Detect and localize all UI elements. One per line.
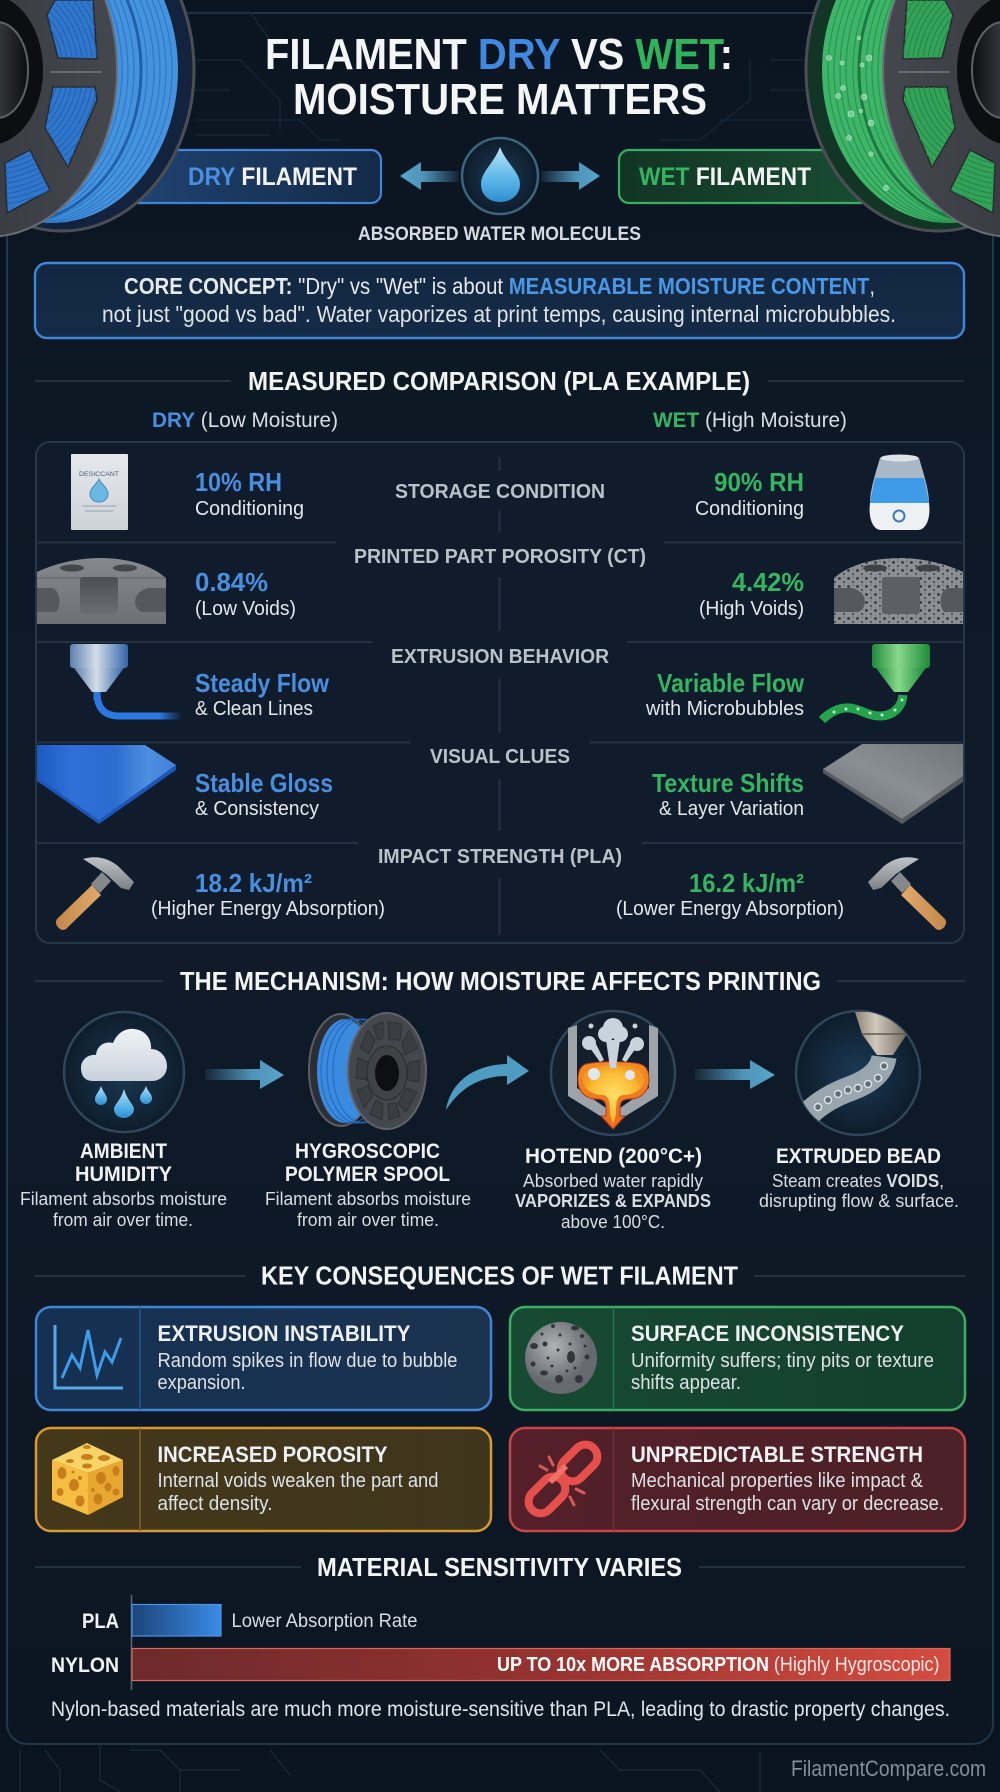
step: ambient humidity: Filament absorbs moisture xyxy=(20,1188,227,1209)
dry filament label: DRY FILAMENT xyxy=(188,163,357,191)
column head: wet: WET (High Moisture) xyxy=(653,408,847,432)
icon: porous cheese cube xyxy=(52,1443,123,1515)
step: ambient humidity: AMBIENT xyxy=(80,1140,167,1163)
icon: rain cloud xyxy=(64,1012,184,1132)
step: extruded bead xyxy=(759,1011,959,1211)
dry porosity value xyxy=(195,567,296,620)
green filament spool xyxy=(806,0,1000,237)
wet visual value: Texture Shifts xyxy=(652,768,804,798)
step: extruded bead: Steam creates VOIDS, xyxy=(772,1170,944,1191)
icon: filament spool xyxy=(309,1013,426,1129)
step: ambient humidity: from air over time. xyxy=(53,1209,193,1230)
icon: desiccant packet: DESICCANT xyxy=(79,471,119,478)
card: extrusion instability: Random spikes in flow due to bubble xyxy=(158,1350,458,1372)
step: extruded bead: disrupting flow & surface. xyxy=(759,1190,959,1211)
card: extrusion instability: expansion. xyxy=(158,1372,246,1394)
icon: water drop xyxy=(462,138,538,214)
dry impact value xyxy=(151,868,385,920)
wet visual value xyxy=(652,768,804,820)
dry storage value xyxy=(195,467,304,520)
icon: glossy blue plate xyxy=(37,745,176,824)
wet storage value: 90% RH xyxy=(714,467,804,497)
blue filament spool xyxy=(0,0,194,237)
bar: Nylon xyxy=(51,1648,950,1680)
absorbed water molecules caption: ABSORBED WATER MOLECULES xyxy=(358,223,641,245)
wet storage value: Conditioning xyxy=(695,497,804,520)
bar: Nylon: NYLON xyxy=(51,1654,119,1677)
wet impact value: 16.2 kJ/m² xyxy=(689,868,804,898)
dry visual value: Stable Gloss xyxy=(195,768,333,798)
dry porosity value: (Low Voids) xyxy=(195,597,296,620)
bar: PLA: Lower Absorption Rate xyxy=(232,1611,418,1632)
wet visual value: & Layer Variation xyxy=(659,797,804,820)
icon: porous printed part xyxy=(834,558,963,624)
dry storage value: 10% RH xyxy=(195,467,282,497)
card: extrusion instability: EXTRUSION INSTABILITY xyxy=(158,1321,411,1346)
step: hotend: above 100°C. xyxy=(561,1211,665,1232)
icon: bead with voids xyxy=(796,1011,920,1135)
icon: right arrow xyxy=(541,162,600,190)
arrow: step 3 to 4 xyxy=(695,1060,775,1089)
row label: porosity: PRINTED PART POROSITY (CT) xyxy=(354,546,646,568)
wet impact value xyxy=(616,868,844,920)
step: hotend: Absorbed water rapidly xyxy=(523,1170,704,1191)
wet storage value xyxy=(695,467,804,520)
step: hygroscopic polymer spool: Filament absorbs moisture xyxy=(265,1188,471,1209)
title: FILAMENT DRY VS WET: xyxy=(265,30,733,79)
title: MOISTURE MATTERS xyxy=(293,75,707,124)
step: ambient humidity: HUMIDITY xyxy=(75,1163,172,1186)
dry extrusion value: Steady Flow xyxy=(195,668,330,698)
card: increased porosity: INCREASED POROSITY xyxy=(158,1442,388,1467)
icon: dense printed part xyxy=(37,558,166,624)
heading: material sensitivity: MATERIAL SENSITIVITY VARIES xyxy=(317,1552,682,1582)
card: increased porosity: affect density. xyxy=(158,1493,272,1515)
chart: absorption bars xyxy=(51,1595,950,1690)
step: hygroscopic polymer spool: from air over time. xyxy=(297,1209,439,1230)
core concept callout xyxy=(35,263,964,338)
panel: comparison table xyxy=(36,442,964,943)
wet porosity value xyxy=(699,567,804,620)
step: hotend xyxy=(515,1011,711,1232)
card: surface inconsistency xyxy=(510,1307,965,1410)
icon: dry nozzle with clean line xyxy=(70,644,182,716)
icon: left arrow xyxy=(400,162,459,190)
wet extrusion value: Variable Flow xyxy=(657,668,805,698)
step: ambient humidity xyxy=(20,1012,227,1230)
step: extruded bead: EXTRUDED BEAD xyxy=(776,1145,941,1168)
icon: unstable flow chart xyxy=(55,1325,123,1388)
dry storage value: Conditioning xyxy=(195,497,304,520)
dry impact value: 18.2 kJ/m² xyxy=(195,868,312,898)
card: surface inconsistency: shifts appear. xyxy=(631,1372,741,1394)
card: unpredictable strength: Mechanical properties like impact & xyxy=(631,1470,924,1492)
icon: right hammer xyxy=(868,857,946,930)
icon: pitted surface xyxy=(525,1322,597,1394)
card: extrusion instability xyxy=(36,1307,491,1410)
icon: left hammer xyxy=(56,857,134,930)
icon: humidifier xyxy=(870,454,929,530)
row label: extrusion behavior: EXTRUSION BEHAVIOR xyxy=(391,646,610,668)
step: hygroscopic polymer spool xyxy=(265,1013,471,1230)
card: surface inconsistency: Uniformity suffers; tiny pits or texture xyxy=(631,1350,934,1372)
dry visual value: & Consistency xyxy=(195,797,320,820)
icon: desiccant packet xyxy=(71,454,128,530)
dry extrusion value xyxy=(195,668,330,720)
column head: dry: DRY (Low Moisture) xyxy=(152,408,338,432)
faint header circuit traces xyxy=(190,12,810,140)
arrow: step 1 to 2 xyxy=(205,1060,284,1089)
step: hygroscopic polymer spool: HYGROSCOPIC xyxy=(295,1140,440,1163)
row label: visual clues: VISUAL CLUES xyxy=(430,746,570,768)
dry impact value: (Higher Energy Absorption) xyxy=(151,897,385,920)
wet extrusion value: with Microbubbles xyxy=(645,697,804,720)
step: hygroscopic polymer spool: POLYMER SPOOL xyxy=(285,1163,450,1186)
footnote: Nylon-based materials are much more moisture-sensitive than PLA, leading to drastic property changes. xyxy=(51,1698,950,1721)
dry extrusion value: & Clean Lines xyxy=(195,697,313,720)
core concept callout: CORE CONCEPT: "Dry" vs "Wet" is about MEASURABLE MOISTURE CONTENT, xyxy=(124,273,875,299)
bar: Nylon: UP TO 10x MORE ABSORPTION (Highly Hygroscopic) xyxy=(497,1654,940,1676)
icon: hotend with steam xyxy=(551,1011,675,1135)
wet filament label: WET FILAMENT xyxy=(639,163,811,191)
arrow: step 2 to 3 (curved) xyxy=(446,1055,529,1110)
title xyxy=(265,30,733,124)
dry porosity value: 0.84% xyxy=(195,567,268,597)
card: surface inconsistency: SURFACE INCONSISTENCY xyxy=(631,1321,904,1346)
card: increased porosity: Internal voids weaken the part and xyxy=(158,1470,438,1492)
wet porosity value: (High Voids) xyxy=(699,597,804,620)
row label: impact strength: IMPACT STRENGTH (PLA) xyxy=(378,846,622,868)
icon: wet nozzle with bubbly bead xyxy=(822,644,930,720)
dry visual value xyxy=(195,768,333,820)
heading: measured comparison: MEASURED COMPARISON (PLA EXAMPLE) xyxy=(248,366,750,396)
core concept callout: not just "good vs bad". Water vaporizes at print temps, causing internal microbubbles. xyxy=(102,301,896,327)
icon: breaking chain link xyxy=(524,1440,602,1518)
step: hotend: HOTEND (200°C+) xyxy=(525,1145,702,1168)
wet filament pill xyxy=(619,150,880,203)
icon: textured gray plate xyxy=(823,744,963,824)
step: hotend: VAPORIZES & EXPANDS xyxy=(515,1190,711,1211)
card: unpredictable strength xyxy=(510,1428,965,1531)
dry filament pill xyxy=(120,150,381,203)
bar: PLA xyxy=(82,1604,418,1636)
card: increased porosity xyxy=(36,1428,491,1531)
heading: the mechanism: THE MECHANISM: HOW MOISTURE AFFECTS PRINTING xyxy=(180,966,821,996)
bar: PLA: PLA xyxy=(82,1610,119,1633)
heading: key consequences: KEY CONSEQUENCES OF WET FILAMENT xyxy=(261,1260,738,1290)
wet impact value: (Lower Energy Absorption) xyxy=(616,897,844,920)
wet extrusion value xyxy=(645,668,805,720)
card: unpredictable strength: UNPREDICTABLE STRENGTH xyxy=(631,1442,923,1467)
wet porosity value: 4.42% xyxy=(732,567,804,597)
row label: storage condition: STORAGE CONDITION xyxy=(395,481,605,503)
card: unpredictable strength: flexural strength can vary or decrease. xyxy=(631,1493,944,1515)
